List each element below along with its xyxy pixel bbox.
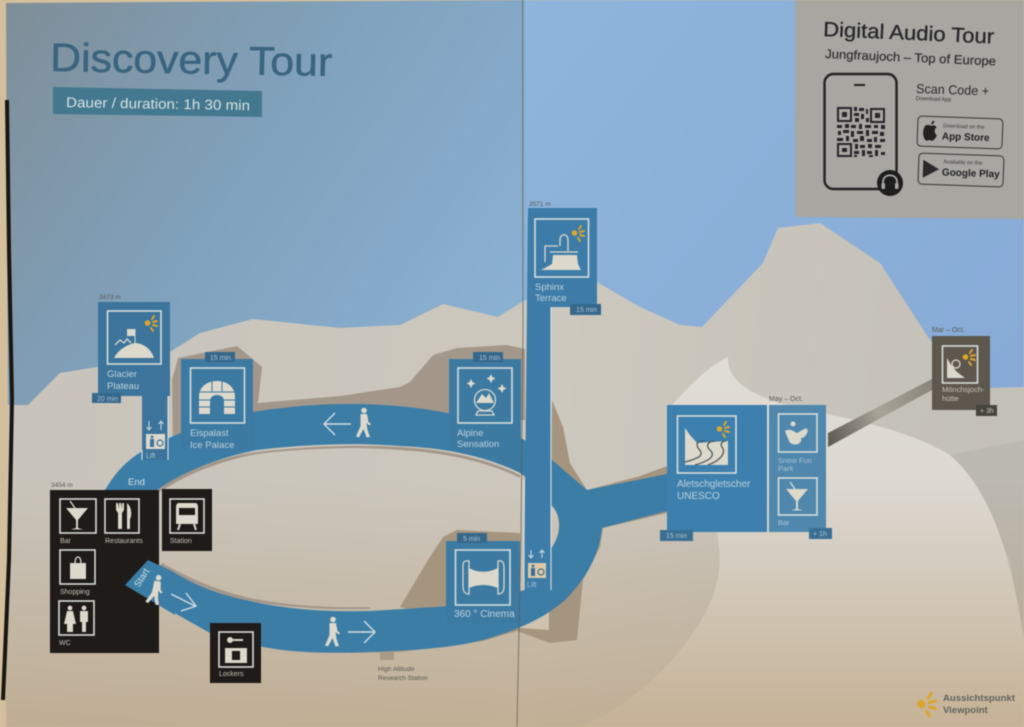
lift icons: Lift [146,453,155,460]
label: Alpine Sensation: Sensation [457,439,499,450]
walker and arrow on the upper route [324,408,371,438]
icon: toilets [59,601,94,635]
legend: viewpoint [917,693,1016,716]
panel: Digital Audio Tour [795,0,1024,219]
time tag: +1h: + 1h [813,531,827,538]
icon: bar [60,499,96,533]
label: Mönchsjochhütte: Mönchsjoch- [942,385,985,394]
label: Shopping: Shopping [60,589,90,596]
grey path to Mönchsjochhütte [828,379,932,447]
lift icons [527,550,546,589]
time tag: +3h: + 3h [980,408,994,415]
time tag: 15 min: 15 min [210,355,231,362]
icon: glacier [678,416,736,473]
time tag: 20 min: 20 min [97,396,118,403]
altitude 3473 m: 3473 m [99,294,121,301]
lift icons [146,421,165,460]
panel: 360 degree Cinema [446,533,520,623]
label: Eispalast Ice Palace: Ice Palace [190,440,234,451]
icon: locker key and case [219,632,253,667]
legend: viewpoint: Viewpoint [943,705,989,716]
season label: May – Oct. [769,396,803,403]
time tag: +1h [809,528,832,539]
time tag: 20 min [92,393,121,403]
panel: Glacier Plateau [92,294,170,460]
label: Sphinx Terrace: Terrace [535,293,567,304]
label: Glacier Plateau: Glacier [107,369,137,380]
icon: walker at start [145,573,166,606]
season label: Mar – Oct. [932,327,965,334]
button: App Store: App Store [942,131,990,144]
altitude 3571 m: 3571 m [529,201,551,208]
icon: apple [923,120,937,141]
label: High Altitude Research Station: High Altitude [378,666,415,673]
subheading: Jungfraujoch – Top of Europe [825,47,996,68]
sky: left page [6,0,525,420]
light gap under the lower lift [520,608,549,630]
panel: Mönchsjochhütte [932,327,997,416]
blue walking route ring [105,404,667,653]
lift icons: Lift [527,582,536,589]
label: Station: Station [170,538,192,545]
button: App Store: Download on the [943,123,985,131]
rock shadows behind the route [110,345,667,660]
label: Glacier Plateau: Plateau [107,381,139,392]
time tag: 15 min: 15 min [576,307,597,314]
label: Lockers: Lockers [219,671,244,678]
icon: hut [942,346,978,383]
button: Google Play: Google Play [942,167,1000,180]
label: Restaurants: Restaurants [105,538,143,545]
label: Alpine Sensation: Alpine [457,428,483,439]
icon: snow globe [458,368,512,423]
label: WC: WC [59,640,71,647]
icon: cinema [456,550,510,605]
label: Bar: Bar [60,538,72,545]
label: Aletschgletscher UNESCO: UNESCO [677,491,720,502]
icon: sphinx terrace [535,219,588,277]
label: Mönchsjochhütte: hütte [942,394,959,403]
label: Snow Fun Park: Snow Fun [778,456,812,465]
icon: igloo [190,368,244,423]
label: Start: Start [132,566,152,590]
label: 360 degree Cinema: 360 ° Cinema [454,609,515,620]
icon: bar [778,478,817,515]
panel: Aletschgletscher UNESCO [660,405,767,541]
sky: right page [525,0,1024,420]
dark block: Lockers [210,623,261,683]
walker and arrow on the lower route [325,617,375,646]
icon: play triangle [923,160,939,178]
icon: glacier plateau [108,311,161,364]
duration badge: Dauer / duration: 1h 30 min [66,94,250,113]
time tag: 5 min: 5 min [463,536,480,543]
scan code text: Download App [916,96,951,103]
left page edge [3,100,12,700]
panel: Eispalast Ice Palace [181,352,253,451]
icon: restaurants [105,499,139,533]
title: Discovery Tour [50,36,333,85]
start flap over the dark block [125,560,196,615]
icon: shopping [60,550,95,584]
button: App Store [917,116,1003,149]
altitude 3454 m: 3454 m [51,482,73,489]
legend: viewpoint: Aussichtspunkt [943,693,1016,704]
label: Aletschgletscher UNESCO: Aletschgletscher [677,479,751,490]
label: Eispalast Ice Palace: Eispalast [190,428,229,439]
icon: train [170,499,204,533]
button: Google Play [918,153,1004,187]
label: High Altitude Research Station: Research Station [378,675,428,682]
mountains and snow field [6,223,1024,727]
icon: phone with QR code [824,74,903,196]
panel: Sphinx Terrace with lift column [524,201,601,590]
panel: May to October summer extras [769,396,832,539]
time tag: 15 min: 15 min [479,355,500,362]
arrow: start direction [171,593,196,611]
button: Google Play: Available on the [943,159,982,167]
label: Snow Fun Park: Park [778,464,794,473]
icon: headphones badge [877,170,903,196]
time tag: 15 min [570,304,601,315]
heading: Digital Audio Tour [823,18,995,48]
scan code text: Scan Code + [916,81,989,99]
duration badge [53,87,262,117]
panel: Alpine Sensation [449,352,521,473]
dark block: Station [162,489,212,551]
icon: snow fun park [778,414,817,452]
label: Bar: Bar [778,518,790,527]
route label: End: End [128,477,145,488]
center fold [517,0,523,727]
time tag: 15 min: 15 min [666,533,687,540]
label: Sphinx Terrace: Sphinx [535,282,564,293]
dark services block: Bar, Restaurants, Shopping, WC [50,482,159,653]
